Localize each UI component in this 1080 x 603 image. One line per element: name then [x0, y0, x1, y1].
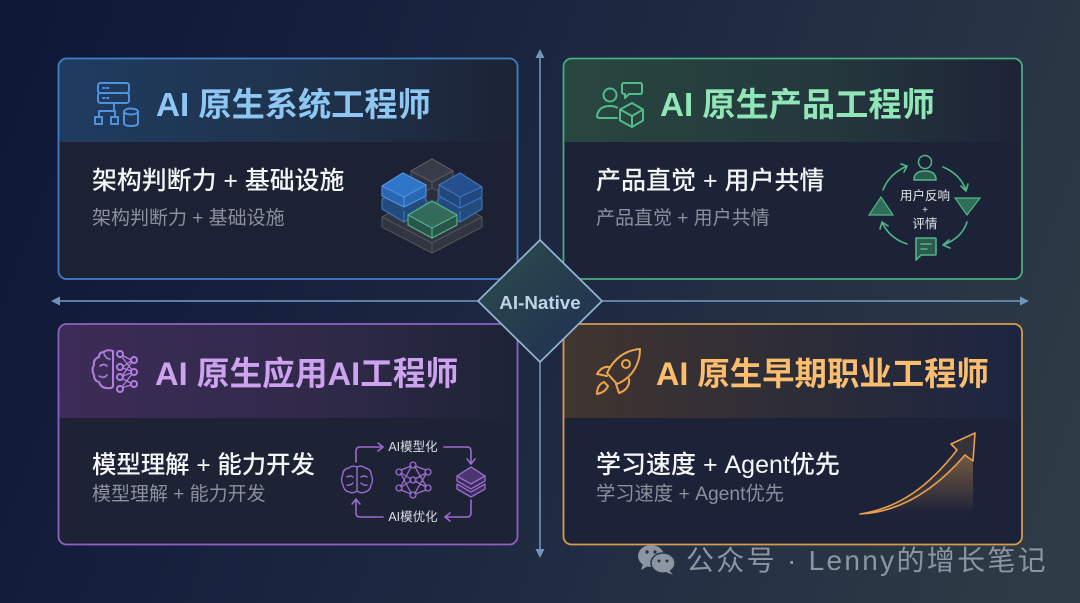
sub text: 产品直觉 + 用户共情: [596, 207, 770, 229]
network: [396, 462, 431, 498]
panel: AI native systems engineer: [58, 58, 518, 279]
illustration: growth arrow: [860, 433, 975, 514]
illustration: feedback cycle: 用户反响: [900, 188, 950, 203]
center badge: AI-Native diamond: [478, 240, 602, 362]
icon: brain with neural net: [92, 350, 137, 392]
sub text: 学习速度 + Agent优先: [596, 483, 784, 505]
main text: 学习速度 + Agent优先: [596, 451, 840, 479]
icon: user, chat and cube: [597, 83, 643, 127]
heading: AI 原生早期职业工程师: [656, 356, 989, 392]
heading: AI 原生系统工程师: [156, 87, 431, 124]
illustration: model loop: AI模优化: [388, 510, 438, 524]
vertical axis arrow: [536, 49, 544, 558]
icon: wechat logo: [638, 545, 675, 575]
horizontal axis arrow: [51, 296, 1029, 306]
icon: server and database: [95, 83, 138, 126]
icon: rocket: [597, 349, 640, 394]
illustration: feedback cycle: [869, 156, 980, 260]
heading: AI 原生产品工程师: [660, 87, 935, 124]
brain: [342, 466, 372, 493]
heading: AI 原生应用AI工程师: [155, 355, 458, 392]
illustration: feedback cycle: 评情: [912, 217, 938, 231]
main text: 产品直觉 + 用户共情: [596, 167, 824, 195]
illustration: isometric blocks: [382, 159, 482, 253]
main text: 模型理解 + 能力开发: [92, 452, 315, 479]
sub text: 模型理解 + 能力开发: [92, 483, 266, 505]
illustration: model loop: AI模型化: [388, 440, 438, 454]
illustration: model loop: [342, 440, 485, 524]
sub text: 架构判断力 + 基础设施: [92, 207, 285, 229]
panel: AI native applied AI engineer: [58, 324, 518, 544]
main text: 架构判断力 + 基础设施: [92, 167, 344, 195]
panel: AI native early-career engineer: [564, 324, 1022, 544]
panel: AI native product engineer: [564, 58, 1022, 279]
illustration: feedback cycle: +: [922, 205, 928, 216]
watermark: 公众号 · Lenny的增长笔记: [686, 545, 1048, 576]
center badge: AI-Native diamond: AI-Native: [499, 292, 581, 313]
